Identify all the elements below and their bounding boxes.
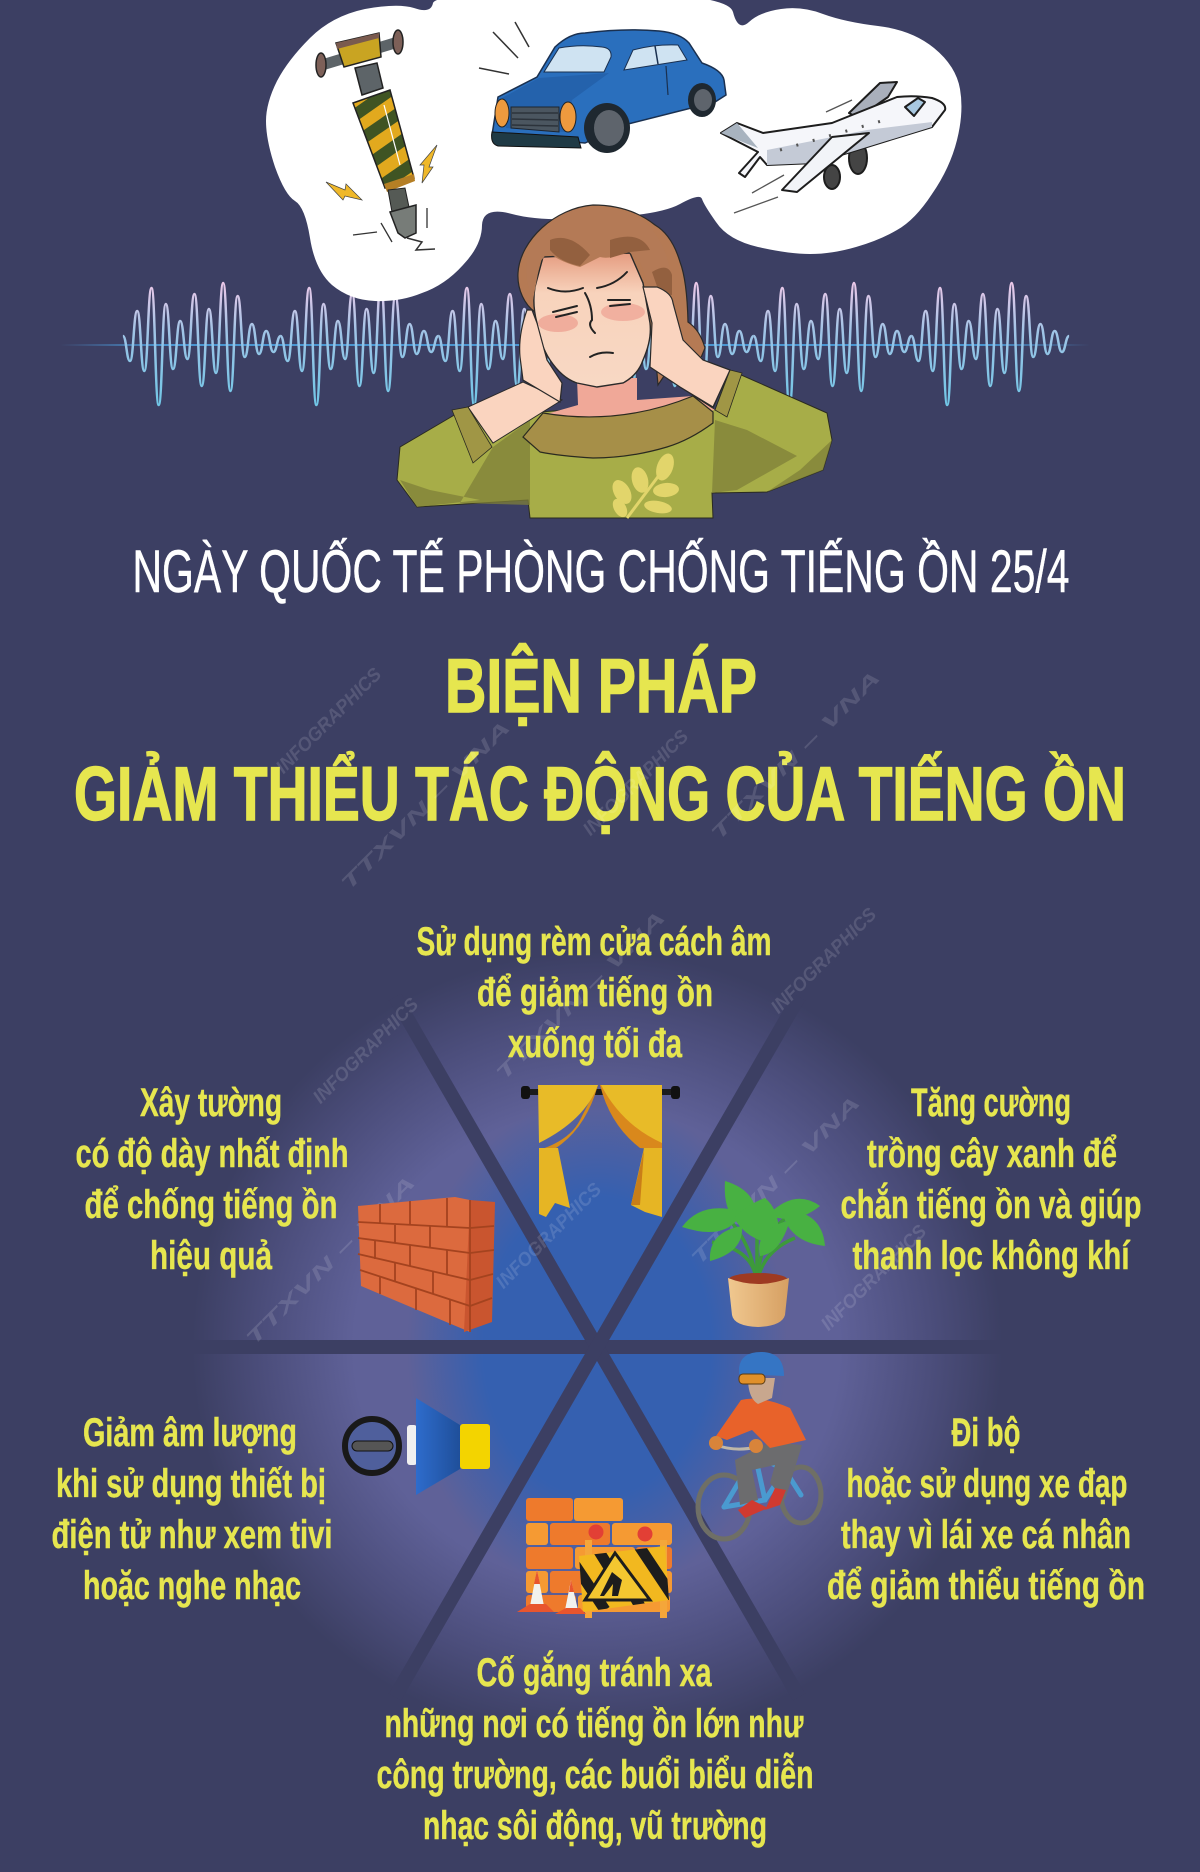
- illustration: woman covering ears: [397, 205, 832, 520]
- icon: blue car: [479, 22, 726, 153]
- sweater shading: [400, 420, 832, 507]
- facial features: [548, 272, 630, 357]
- icon: jackhammer: [316, 30, 437, 250]
- watermarks: TTXVN – VNA: [707, 667, 885, 845]
- text: brick wall: để chống tiếng ồn: [84, 1183, 338, 1227]
- text: speaker: khi sử dụng thiết bị: [56, 1462, 326, 1506]
- forearms: [468, 382, 562, 443]
- hands: [520, 310, 562, 402]
- icon: speaker with minus: [345, 1398, 490, 1495]
- text: speaker: hoặc nghe nhạc: [83, 1564, 301, 1608]
- icon: brick wall: [358, 1197, 495, 1332]
- text: speaker: điện tử như xem tivi: [52, 1513, 332, 1557]
- watermarks: INFOGRAPHICS: [492, 1179, 606, 1293]
- face: [534, 253, 650, 387]
- watermarks: INFOGRAPHICS: [579, 726, 693, 840]
- text: cyclist: Đi bộ: [952, 1411, 1020, 1455]
- text: speaker: [52, 1411, 332, 1608]
- watermarks: INFOGRAPHICS: [309, 994, 423, 1108]
- thought cloud: [266, 0, 961, 301]
- text: plant: [840, 1081, 1142, 1278]
- watermarks: TTXVN – VNA: [492, 907, 670, 1085]
- icon: potted plant: [682, 1181, 825, 1327]
- panel: plant: [682, 1081, 1142, 1327]
- watermarks: INFOGRAPHICS: [272, 664, 386, 778]
- watermarks: INFOGRAPHICS: [767, 904, 881, 1018]
- icon: construction site: [517, 1498, 675, 1618]
- text: cyclist: [827, 1411, 1145, 1608]
- text: construction: những nơi có tiếng ồn lớn như: [384, 1702, 804, 1746]
- text: construction: Cố gắng tránh xa: [476, 1649, 712, 1695]
- icon: curtains: [521, 1085, 680, 1217]
- panel: speaker: [52, 1398, 490, 1608]
- text: brick wall: hiệu quả: [150, 1234, 273, 1278]
- watermarks: [242, 664, 931, 1350]
- panel: brick wall: [76, 1081, 495, 1332]
- text: curtains: [416, 920, 772, 1066]
- watermarks: TTXVN – VNA: [242, 1172, 420, 1350]
- watermarks: INFOGRAPHICS: [817, 1221, 931, 1335]
- cuffs: [452, 407, 492, 463]
- collar: [523, 396, 713, 458]
- text: plant: Tăng cường: [911, 1081, 1071, 1125]
- text: curtains: để giảm tiếng ồn: [477, 971, 713, 1015]
- text: construction: nhạc sôi động, vũ trường: [423, 1804, 767, 1848]
- wheel background: [170, 952, 1030, 1742]
- text: brick wall: Xây tường: [140, 1081, 282, 1125]
- text: speaker: Giảm âm lượng: [83, 1411, 297, 1455]
- hair fringe: [526, 207, 672, 300]
- text: plant: trồng cây xanh để: [867, 1132, 1117, 1176]
- hair back: [518, 205, 705, 385]
- sweater leaf: [609, 451, 680, 520]
- text: curtains: Sử dụng rèm cửa cách âm: [416, 920, 772, 964]
- text: brick wall: [76, 1081, 348, 1278]
- title: [74, 643, 1126, 837]
- text: curtains: xuống tối đa: [508, 1022, 683, 1066]
- panel: curtains: [416, 920, 772, 1217]
- sweater: [397, 370, 832, 518]
- panel: cyclist: [698, 1352, 1145, 1608]
- waveform: [60, 283, 1090, 405]
- icon: cyclist: [698, 1352, 821, 1539]
- icon: airplane: [721, 82, 945, 213]
- watermarks: TTXVN – VNA: [337, 717, 515, 895]
- title: BIỆN PHÁP: [445, 643, 757, 729]
- text: brick wall: có độ dày nhất định: [76, 1132, 348, 1176]
- text: construction: [376, 1649, 814, 1848]
- neck: [543, 378, 715, 424]
- panel: construction: [376, 1498, 814, 1848]
- text: construction: công trường, các buổi biểu diễn: [376, 1751, 814, 1797]
- watermarks: TTXVN – VNA: [687, 1092, 865, 1270]
